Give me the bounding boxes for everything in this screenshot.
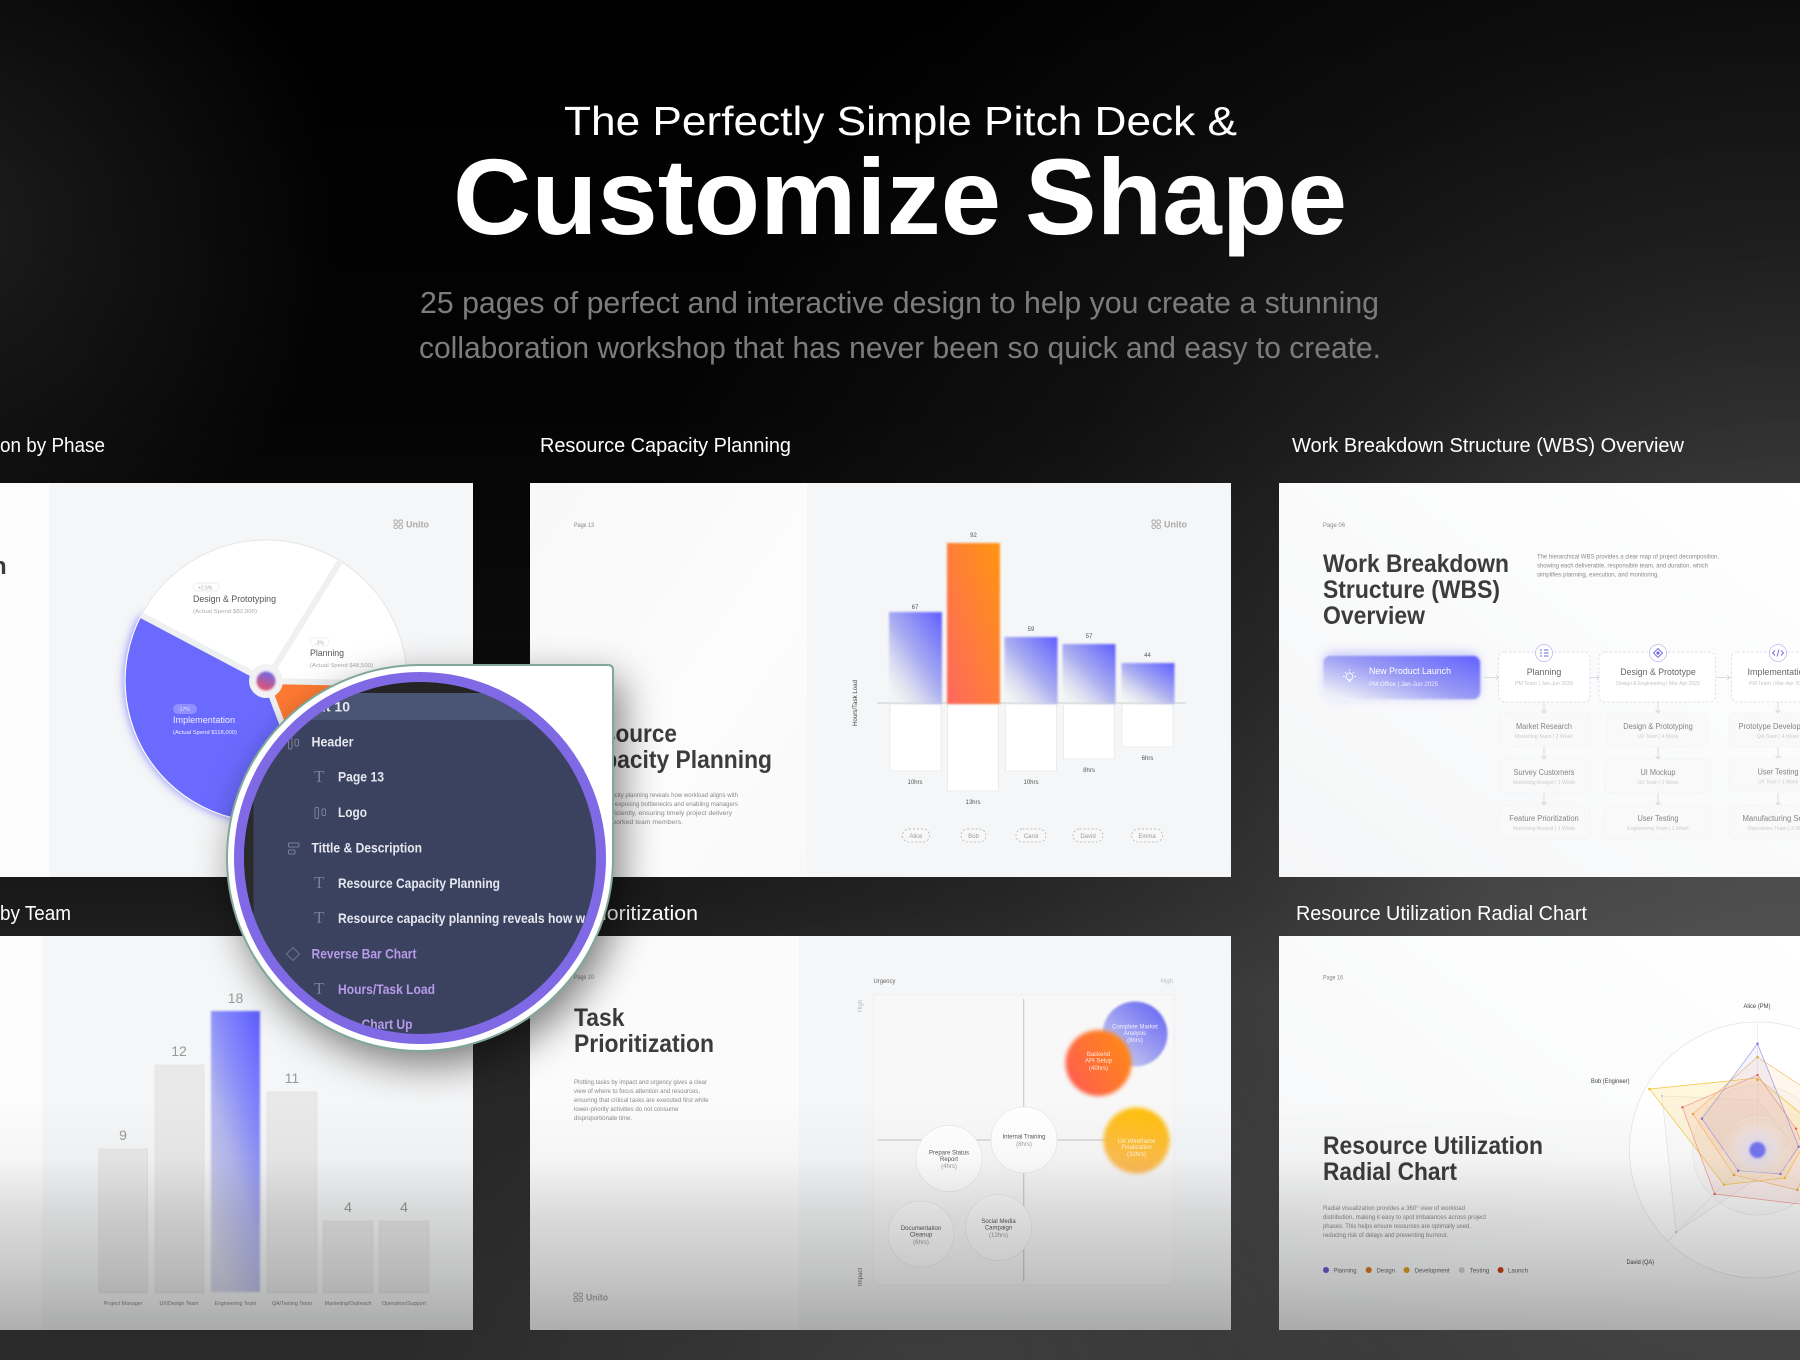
bubble: social media campaign: Campaign [985,1226,1012,1232]
legend: Planning [1334,1268,1356,1274]
column: design and prototype [1599,644,1716,839]
logo: Unito: Unito [586,1292,608,1304]
bar: Bob [947,533,1000,806]
panel title: Resource [574,720,677,748]
section labels, row 1: Work Breakdown Structure (WBS) Overview [1292,435,1685,457]
panel description: The hierarchical WBS provides a clear map of project decomposition, [1537,554,1719,560]
panel: allocation by phase pie [0,483,473,877]
radar chart [1591,1004,1800,1278]
name pills: David [1080,834,1096,840]
name pills: Emma [1138,834,1156,840]
panel description: lower-priority activities do not consume [574,1106,679,1113]
column: design and prototype: UI Mockup [1640,768,1676,777]
series: development [1650,1078,1800,1185]
legend: Development [1415,1268,1450,1274]
radar chart: David (QA) [1626,1260,1654,1266]
bar: David: 8hrs [1083,768,1095,774]
layer: resource capacity planning: Resource Capacity Planning [338,875,500,891]
column: design and prototype: Engineering Team | 1 Week [1627,826,1689,832]
bar chart: Engineering Team [214,1301,257,1307]
panel description: team capacity, exposing bottlenecks and enabling managers [574,801,739,808]
layer: logo: Logo [338,804,367,820]
radar chart: Bob (Engineer) [1591,1079,1630,1085]
label: design [193,583,276,615]
bar: David [1062,634,1116,774]
panel description: ensuring that critical tasks are executed first while [574,1097,709,1104]
label: planning: (Actual Spend $48,500) [310,663,373,669]
panel title [574,1004,714,1058]
bar: Carol [1004,627,1058,786]
bar chart: Project Manager [104,1301,143,1307]
panel description: without overworked team members. [573,819,683,826]
section labels, row 2: Resource Utilization Radial Chart [1296,903,1587,925]
panel: resource capacity planning: Page 13 [574,523,595,529]
column: design and prototype: UX Team | 1 Week [1638,780,1679,786]
bubble: documentation cleanup: Cleanup [910,1232,933,1238]
section labels, row 1: Resource Capacity Planning [540,435,791,457]
bubble: complete market analysis: Complete Market [1112,1024,1158,1030]
layers list [244,682,586,1032]
label: planning: Planning [310,648,344,659]
priority matrix: Urgency [874,979,896,985]
root node: new product launch [1322,652,1481,700]
bar chart: Operation/Support [382,1301,426,1307]
panel description: to allocate efficiently, ensuring timely project delivery [574,810,733,817]
bar chart: 12 [171,1043,187,1059]
panel: resource utilization radial chart [1279,936,1800,1330]
bar: Alice [889,605,942,786]
layer: title and description: Tittle & Description [312,840,422,856]
panel: task prioritization [530,936,1231,1330]
layer: reverse bar chart [286,947,416,961]
subtitle [419,285,1381,365]
label: implementation: Implementation [173,715,235,726]
label: implementation: -17% [178,707,190,713]
bubble: ux wireframe finalization: Finalization [1121,1145,1152,1151]
column: design and prototype: Design & Prototype [1620,667,1696,678]
bar chart: 9 [119,1127,127,1143]
label: implementation: (Actual Spend $118,000) [173,730,237,736]
main title: Customize Shape: Shape [1025,136,1347,257]
panel description: phases. This helps ensure resources are optimally used, [1323,1223,1471,1230]
panel: resource capacity planning [530,483,1231,877]
label: design: +2.5% [198,586,213,592]
column: design and prototype: UX Team | 4 Week [1638,734,1679,740]
bar chart: 11 [285,1070,299,1086]
panel title: Structure (WBS) [1323,576,1500,604]
bubble: complete market analysis [1102,1002,1168,1066]
layer: description text: Resource capacity planning reveals how workload [338,910,629,926]
bubble: internal training: Internal Training [1002,1134,1046,1140]
bar: Emma [1122,653,1174,762]
panel description [573,792,739,826]
label: planning: -3% [315,640,324,646]
panel description: Plotting tasks by impact and urgency gives a clear [574,1079,708,1086]
layer: page 13: Page 13 [338,768,384,784]
main title: Customize Shape: Customize [453,136,1001,257]
panel title [574,720,772,774]
layer: resource capacity planning [314,877,500,891]
panel description [1537,554,1719,578]
reverse bar chart [853,533,1186,842]
panel description: view of where to focus attention and resources, [574,1088,700,1095]
bar: Alice: 67 [912,605,919,611]
bubble: complete market analysis: Analysis [1124,1031,1146,1037]
column: planning [1498,644,1590,839]
bubble: documentation cleanup [888,1201,954,1267]
magnifier callout: layers panel [227,665,629,1065]
label: planning [310,638,373,669]
priority matrix: Impact [858,1268,864,1286]
bubble: social media campaign: Social Media [981,1219,1016,1225]
priority matrix [858,979,1174,1286]
layer: title and description [288,842,422,856]
label: design: Design & Prototyping [193,594,276,605]
bar chart: 18 [228,990,243,1006]
bubble: internal training [991,1107,1057,1173]
column: planning: Planning [1527,667,1561,678]
series: planning [1702,1044,1799,1174]
layer: header [288,736,354,750]
column: planning: Market Research [1516,722,1572,731]
panel title: Radial Chart [1323,1158,1458,1186]
panel description: Radial visualization provides a 360° view of workload [1323,1204,1465,1212]
bubble: ux wireframe finalization [1104,1108,1170,1174]
series: launch [1682,1075,1800,1207]
bubble: backend api setup: Backend [1087,1052,1110,1058]
logo: Unito [574,1292,608,1304]
panel: workload by team [0,936,473,1330]
panel title: Task [574,1004,625,1032]
legend: Launch [1508,1268,1528,1274]
bubble: complete market analysis: (8hrs) [1127,1038,1143,1044]
label: implementation [173,704,237,736]
title line: The Perfectly Simple Pitch Deck: The Perfectly Simple Pitch Deck & [564,98,1237,144]
name pills: Carol [1024,834,1038,840]
layer: description text [314,912,586,926]
bubble: prepare status report [916,1126,982,1192]
logo: Unito: Unito [1164,520,1187,530]
panel description: distribution, making it easy to spot imbalances across project [1323,1214,1486,1221]
section labels, row 2 [0,903,1587,925]
layer: hours and task load: T [314,979,325,998]
layer: page 13 [314,771,384,784]
layer: logo [314,807,367,820]
panel description: simplifies planning, execution, and monitoring. [1537,572,1659,578]
column: design and prototype: User Testing [1638,814,1678,823]
legend [1323,1267,1528,1274]
main title: Customize Shape [453,136,1347,257]
legend: Testing [1470,1268,1489,1274]
bubble: backend api setup [1066,1030,1132,1096]
bar: Carol: 10hrs [1023,780,1039,786]
bubble: internal training: (8hrs) [1016,1142,1032,1148]
series: design [1693,1057,1800,1190]
bar: Emma: 44 [1144,653,1151,659]
panel title: Prioritization [574,1030,714,1058]
panel title: Capacity Planning [574,746,772,774]
section labels, row 1 [0,435,1685,457]
layer: page 13: T [314,767,325,786]
panel title: Resource Utilization [1323,1132,1543,1160]
column: planning: Survey Customers [1514,768,1574,777]
panel description [574,1079,709,1122]
panel title [1323,554,1508,624]
panel title: Work Breakdown [1323,550,1509,578]
column: design and prototype: Design & Prototyping [1623,722,1693,731]
series: testing [1662,1096,1790,1232]
panel description: showing each deliverable, responsible team, and duration, which [1537,562,1708,570]
connector arrows [1484,675,1780,805]
layer: chart up: Chart Up [362,1016,412,1032]
priority matrix: High [858,1000,864,1012]
legend: Design [1376,1268,1395,1274]
column: design and prototype: Design & Engineering | Mar-Apr 2025 [1616,681,1700,687]
bar chart: QA/Testing Team [272,1301,312,1307]
bar chart: Marketing/Outreach [324,1301,372,1307]
layer: reverse bar chart: Reverse Bar Chart [312,946,417,962]
header block [419,98,1381,365]
panel description: Resource capacity planning reveals how workload aligns with [574,792,738,799]
bubble: ux wireframe finalization: (32hrs) [1127,1152,1146,1158]
layer: header: Header [312,734,354,750]
panel: task prioritization: Page 10 [574,975,595,981]
bubble: prepare status report: Prepare Status [929,1150,969,1156]
section labels, row 2: by Team [0,903,71,925]
bubble: backend api setup: API Setup [1085,1058,1113,1064]
radar chart: Alice (PM) [1744,1004,1770,1010]
bar: Bob: 13hrs [965,800,981,806]
bubble: ux wireframe finalization: UX Wireframe [1118,1139,1156,1145]
column: planning: PM Team | Jan-Jun 2025 [1515,681,1573,687]
column: implementation: UX Team | 1 Week [1758,780,1798,786]
bar: Carol: 59 [1028,627,1035,633]
logo: Unito: Unito [406,520,429,530]
layers list: Unit 10 [303,698,350,714]
panel: work breakdown structure: Page 06 [1323,523,1346,529]
bubble: documentation cleanup: (6hrs) [913,1240,929,1246]
column: implementation [1729,644,1800,839]
column: planning: Feature Prioritization [1509,814,1579,823]
bubble: social media campaign [966,1194,1032,1260]
section labels, row 2: ioritization [602,903,698,925]
root node: new product launch: New Product Launch [1369,666,1451,677]
column: planning: Marketing Team | 2 Week [1515,734,1574,740]
bubble: social media campaign: (12hrs) [989,1233,1008,1239]
panel: resource utilization radial chart: Page 16 [1323,976,1344,982]
root node: new product launch: PM Office | Jan-Jun 2025 [1369,681,1439,688]
subtitle: collaboration workshop that has never been so quick and easy to create. [419,330,1381,365]
priority matrix: High [1161,979,1173,985]
panel title [1324,1136,1542,1180]
name pills: Alice [909,834,923,840]
bar chart: 4 [400,1199,408,1215]
bar: Alice: 10hrs [907,780,923,786]
column: planning: Marketing Analyst | 1 Week [1513,780,1576,786]
layer: hours and task load: Hours/Task Load [338,981,435,997]
bar: Emma: 6hrs [1142,756,1153,762]
logo: Unito [394,520,429,529]
bar chart [99,990,429,1307]
panel description [1323,1204,1486,1239]
subtitle: 25 pages of perfect and interactive design to help you create a stunning [420,285,1379,320]
layer: hours and task load [314,983,434,994]
column: planning: Marketing Analyst | 1 Week [1513,826,1576,832]
section labels, row 1: on by Phase [0,435,105,457]
layer: resource capacity planning: T [314,873,325,892]
name pills [902,829,1162,842]
bar chart: 4 [344,1199,352,1215]
panel description: reducing risk of delays and preventing burnout. [1323,1232,1448,1239]
reverse bar chart: Hours/Task Load [853,680,859,726]
bar: Bob: 92 [970,533,977,539]
bubble: prepare status report: (4hrs) [941,1164,957,1170]
logo: Unito [1152,520,1187,530]
column: implementation: QA Team | 4 Week [1757,734,1799,740]
label: design: (Actual Spend $82,000) [193,609,257,615]
bubble: documentation cleanup: Documentation [901,1226,941,1232]
pie chart [125,540,410,822]
panel title: Overview [1323,602,1426,630]
layer: description text: T [314,908,325,927]
bar chart: UX/Design Team [160,1301,199,1307]
bar: David: 57 [1086,634,1093,640]
bubble: prepare status report: Report [940,1157,958,1163]
name pills: Bob [968,834,979,840]
panel: work breakdown structure [1279,483,1800,877]
bubble: backend api setup: (40hrs) [1089,1066,1108,1072]
panel description: disproportionate time. [574,1115,632,1122]
